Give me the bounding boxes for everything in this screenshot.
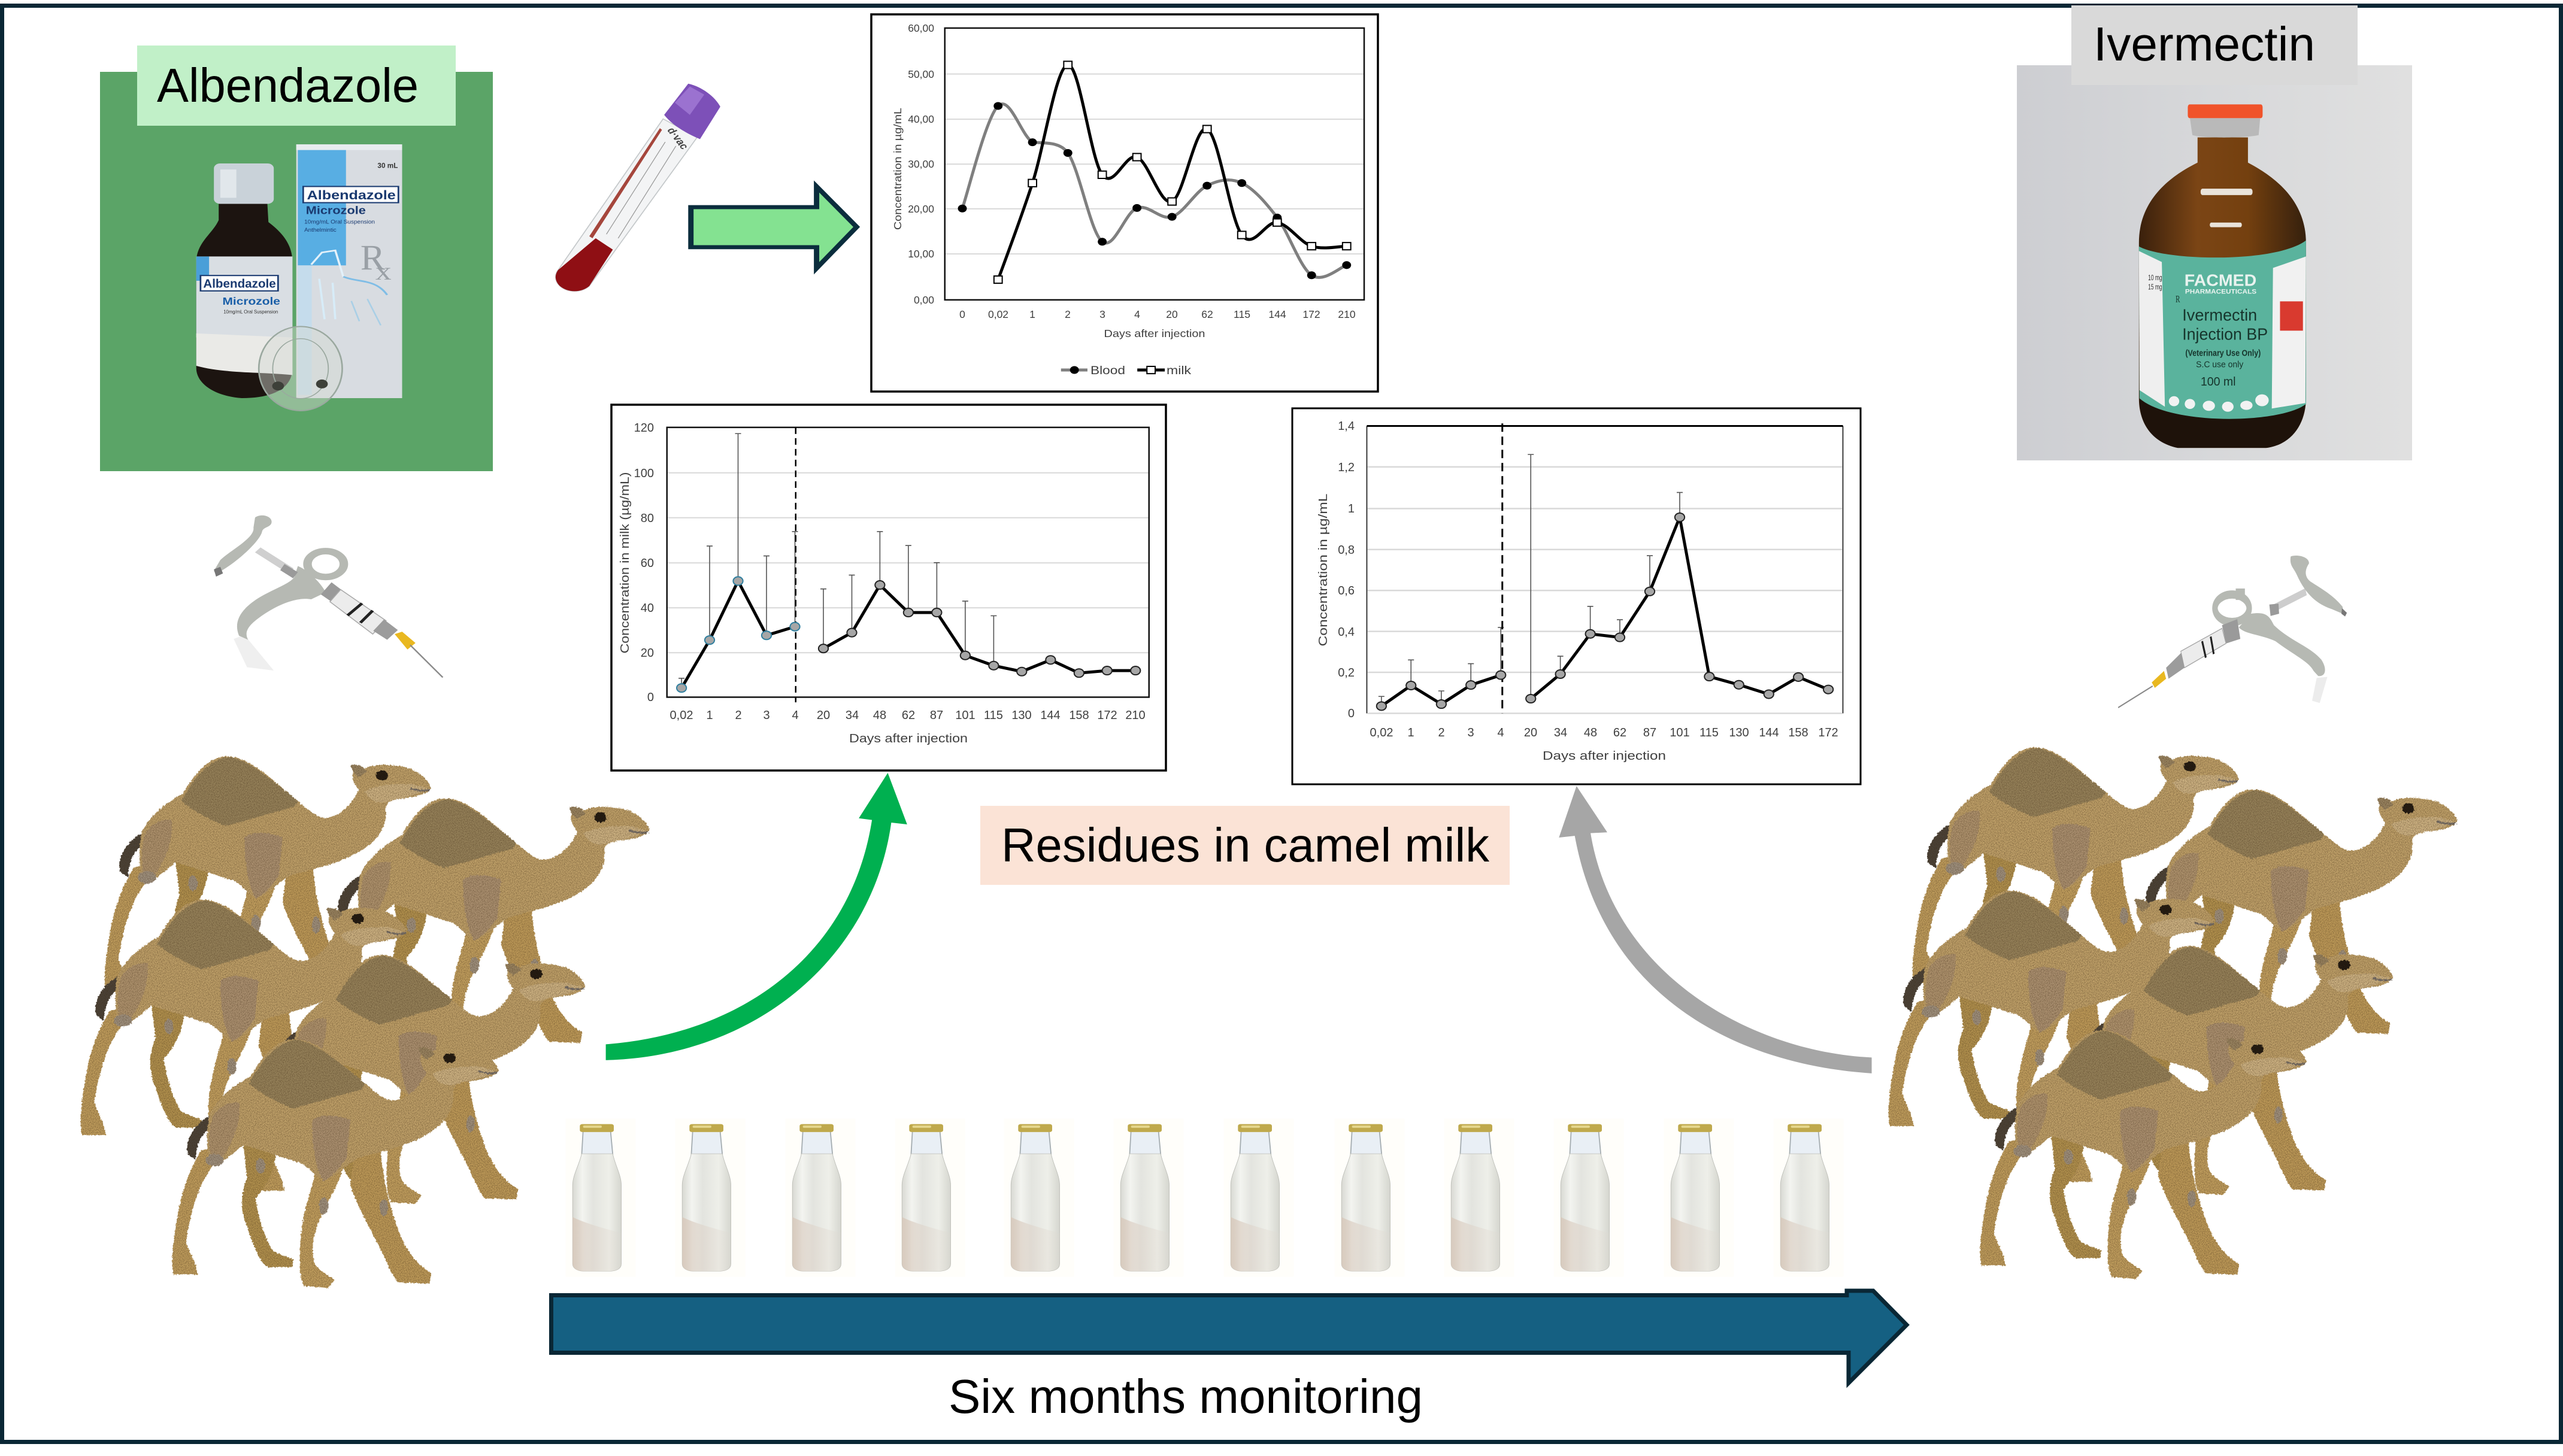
bottle 1 [566,1118,636,1277]
x axis ticks: 3 [763,709,770,722]
x axis ticks: 144 [1268,308,1286,320]
x axis ticks: 4 [792,709,799,722]
icon: ivermectin bottle: FACMED [2185,271,2256,289]
x axis ticks: 1 [706,709,713,722]
camel 2 [2131,789,2457,1039]
x axis ticks: 144 [1040,709,1061,722]
icon: albendazole carton and bottle: R [360,238,385,278]
y axis ticks: 0,6 [1338,584,1355,597]
x axis ticks: 172 [1097,709,1117,722]
chart: blood and milk concentration [871,14,1378,392]
line: milk [998,65,1347,280]
icon: albendazole carton and bottle: 30 mL [377,162,398,170]
y axis ticks: 0 [647,691,654,704]
camel 1 [1913,747,2238,996]
x axis ticks [1370,726,1838,739]
icon: ivermectin bottle: PHARMACEUTICALS [2185,288,2257,296]
label: six months monitoring: Six months monitoring [949,1370,1423,1423]
camel 5 [1980,1030,2306,1279]
dashed separator [795,427,796,702]
x axis ticks: 87 [930,709,943,722]
label: residues in camel milk [980,806,1510,885]
markers [1377,513,1833,710]
x axis ticks: 115 [1699,726,1719,739]
ivermectin label [2071,5,2358,85]
icon: albendazole carton and bottle: Anthelmintic [304,228,337,233]
camel 1 [105,756,431,1005]
panel: albendazole product photo [100,46,493,471]
legend text: milk [1167,365,1192,377]
markers: milk [994,61,1351,283]
bottle 10 [1554,1118,1624,1277]
x axis ticks: 20 [1166,308,1178,320]
icon: ivermectin bottle: S.C use only [2196,360,2244,369]
ivermectin label: Ivermectin [2094,17,2315,71]
icon: blood collection tube [556,84,720,291]
x axis title: Days after injection [1543,750,1666,763]
camel 5 [172,1039,498,1288]
icon: ivermectin bottle: 100 ml [2201,374,2235,389]
x axis ticks: 130 [1729,726,1749,739]
arrow: six months timeline [551,1291,1907,1383]
arrow: green curved to albendazole chart [606,773,907,1060]
icon: blood collection tube: d·vac [665,126,692,151]
y axis ticks: 40,00 [908,113,934,125]
x axis ticks: 20 [817,709,830,722]
x axis ticks: 4 [1134,308,1140,320]
x axis ticks: 2 [735,709,742,722]
line: late series [1531,517,1828,699]
error bars [678,433,996,688]
y axis ticks: 0 [1348,707,1355,720]
x axis ticks: 158 [1069,709,1089,722]
y axis ticks [908,22,934,306]
x axis ticks: 172 [1302,308,1320,320]
y axis ticks: 30,00 [908,158,934,170]
panel: ivermectin product photo [2017,5,2412,460]
icon: ivermectin bottle: Ivermectin [2182,306,2257,324]
chart: albendazole concentration in milk [611,405,1166,771]
icon: syringe left [214,515,443,677]
x axis ticks: 34 [1554,726,1567,739]
x axis ticks: 3 [1099,308,1105,320]
y axis title: Concentration in µg/mL [1317,493,1330,647]
y axis ticks: 0,00 [914,294,934,306]
markers: blood [958,102,1351,279]
y axis ticks [1338,420,1355,720]
icon: ivermectin bottle: 15 mg [2148,283,2162,292]
icon: ivermectin bottle: Injection BP [2182,325,2268,344]
y axis ticks: 0,2 [1338,666,1355,680]
x axis ticks: 3 [1467,726,1474,739]
y axis ticks: 50,00 [908,68,934,80]
x axis ticks: 0,02 [670,709,693,722]
y axis ticks: 100 [634,467,654,480]
x axis ticks: 115 [984,709,1003,722]
legend markers [1061,366,1165,374]
camel 3 [1889,891,2214,1140]
bottle 3 [786,1118,856,1277]
chart: ivermectin concentration in milk [1292,408,1861,784]
markers: early [677,577,800,692]
milk bottles row [566,1118,1844,1277]
y axis ticks: 20,00 [908,203,934,215]
y axis title: Concentration in milk (µg/mL) [619,472,632,653]
icon: albendazole carton and bottle: x [375,257,392,285]
x axis ticks [670,709,1146,722]
y axis ticks: 1,2 [1338,461,1355,474]
x axis title: Days after injection [849,732,968,745]
bottle 4 [895,1118,965,1277]
dashed separator [1501,423,1503,713]
x axis ticks: 48 [873,709,886,722]
y axis ticks: 1,4 [1338,420,1355,433]
x axis ticks: 101 [1670,726,1690,739]
x axis ticks: 62 [1613,726,1626,739]
legend text [1090,365,1192,377]
bottle 9 [1444,1118,1514,1277]
error bars [1379,454,1683,706]
icon: albendazole carton and bottle: 10mg/mL Oral Suspension [223,310,278,315]
icon: syringe right [2118,556,2347,708]
x axis ticks: 62 [902,709,915,722]
y axis ticks: 40 [641,602,654,615]
icon: ivermectin bottle: 10 mg [2148,274,2162,283]
markers: late [819,581,1140,677]
bottle 11 [1664,1118,1734,1277]
x axis ticks: 0 [959,308,965,320]
albendazole label [137,46,456,126]
camel 2 [323,798,649,1048]
x axis ticks: 144 [1759,726,1779,739]
line: blood [962,104,1347,277]
x axis ticks: 172 [1818,726,1838,739]
y axis ticks: 60,00 [908,22,934,34]
icon: albendazole carton and bottle: 10mg/mL Oral Suspension [304,219,375,225]
y axis title: Concentration in µg/mL [892,108,904,230]
icon: albendazole carton and bottle: Microzole [222,295,280,307]
x axis ticks [959,308,1356,320]
icon: ivermectin bottle: R [2176,294,2180,305]
x axis ticks: 1 [1407,726,1414,739]
line: early series [1382,675,1501,706]
icon: camel herd right [1889,747,2457,1279]
y axis ticks: 80 [641,512,654,525]
plot area [1367,423,1843,713]
x axis ticks: 158 [1788,726,1808,739]
bottle 12 [1774,1118,1844,1277]
icon: camel herd left [81,756,649,1288]
arrow: gray curved to ivermectin chart [1559,786,1872,1073]
y axis ticks: 0,4 [1338,626,1355,639]
icon: albendazole carton and bottle: Microzole [306,204,366,217]
icon: ivermectin bottle: (Veterinary Use Only) [2185,348,2261,358]
bottle 2 [675,1118,746,1277]
bottle 6 [1114,1118,1184,1277]
albendazole label: Albendazole [157,59,419,112]
x axis ticks: 210 [1338,308,1356,320]
x axis ticks: 48 [1584,726,1597,739]
y axis ticks: 120 [634,421,654,435]
x axis ticks: 0,02 [1370,726,1393,739]
x axis ticks: 20 [1524,726,1537,739]
legend text: Blood [1090,365,1125,377]
label: residues in camel milk: Residues in camel milk [1001,818,1490,872]
bottle 8 [1335,1118,1405,1277]
icon: ivermectin bottle [2139,104,2306,448]
x axis ticks: 0,02 [988,308,1008,320]
camel 4 [259,955,585,1204]
y axis ticks: 10,00 [908,248,934,260]
plot area [667,427,1149,702]
x axis ticks: 2 [1065,308,1071,320]
camel 3 [81,900,407,1149]
y axis ticks: 1 [1348,502,1355,515]
y axis ticks [634,421,654,704]
x axis ticks: 2 [1438,726,1445,739]
x axis ticks: 115 [1234,308,1250,320]
x axis ticks: 130 [1011,709,1032,722]
x axis ticks: 4 [1497,726,1504,739]
y axis ticks: 0,8 [1338,544,1355,557]
x axis ticks: 101 [955,709,975,722]
x axis ticks: 62 [1201,308,1213,320]
x axis ticks: 210 [1125,709,1146,722]
x axis ticks: 34 [846,709,859,722]
y axis ticks: 20 [641,647,654,660]
bottle 7 [1224,1118,1294,1277]
plot area with curves [945,28,1364,374]
icon: albendazole carton and bottle [196,144,402,411]
x axis title: Days after injection [1104,327,1205,339]
arrow: blood to chart [691,186,857,268]
x axis ticks: 87 [1643,726,1656,739]
line: late series [823,585,1135,673]
icon: albendazole carton and bottle: Albendazole [203,277,276,291]
x axis ticks: 1 [1029,308,1035,320]
icon: albendazole carton and bottle: Albendazole [307,188,396,202]
bottle 5 [1004,1118,1074,1277]
y axis ticks: 60 [641,557,654,570]
line: early series [681,581,795,688]
camel 4 [2067,946,2393,1195]
